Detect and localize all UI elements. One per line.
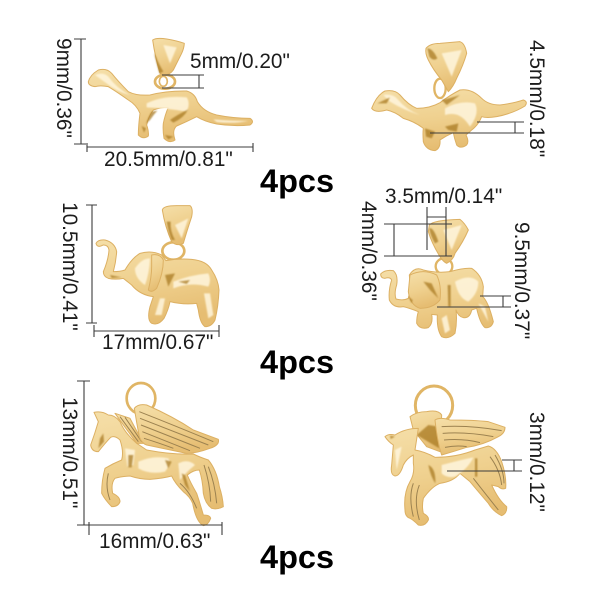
dimension: dinosaur width 20.5mm: 20.5mm/0.81"	[104, 148, 233, 171]
dimension: pegasus width 16mm: 16mm/0.63"	[99, 530, 210, 553]
charm: pegasus front view	[91, 383, 223, 526]
dimension: elephant bail width 3.5mm: 3.5mm/0.14"	[385, 185, 502, 208]
dimension: elephant bail width 3.5mm	[385, 185, 502, 256]
dimension: pegasus height 13mm: 13mm/0.51"	[58, 397, 81, 508]
charm: elephant angled view	[381, 219, 493, 338]
charm: elephant front view	[96, 206, 219, 327]
dimension: dinosaur thickness 4.5mm	[430, 40, 548, 157]
dimension: dinosaur height 9mm	[52, 38, 86, 144]
charm: pegasus angled view	[385, 386, 507, 525]
dimension: elephant height 10.5mm: 10.5mm/0.41"	[58, 202, 81, 331]
dimension: dinosaur width 20.5mm	[87, 143, 253, 171]
dimension: elephant height 10.5mm	[58, 202, 97, 331]
dimension: elephant width 17mm: 17mm/0.67"	[102, 331, 213, 354]
dimension: elephant bail height 4mm	[357, 201, 452, 301]
dimension: dinosaur height 9mm: 9mm/0.36"	[52, 38, 75, 138]
dimension: pegasus thickness 3mm	[447, 412, 548, 512]
quantity label: pegasus: 4pcs	[260, 539, 334, 575]
dimension: dinosaur bail 5mm: 5mm/0.20"	[190, 50, 290, 73]
dimension: pegasus width 16mm	[89, 522, 222, 553]
dimension: elephant thickness 9.5mm: 9.5mm/0.37"	[510, 222, 533, 339]
charm: dinosaur angled view	[372, 42, 526, 151]
dimension: dinosaur bail 5mm	[162, 50, 290, 88]
dimension: elephant thickness 9.5mm	[437, 222, 533, 339]
charm: dinosaur front view	[88, 38, 252, 142]
dimension: pegasus height 13mm	[58, 381, 90, 525]
dimension: pegasus thickness 3mm: 3mm/0.12"	[525, 412, 548, 512]
quantity label: elephant: 4pcs	[260, 344, 334, 380]
dimension: elephant bail height 4mm: 4mm/0.36"	[357, 201, 380, 301]
dimension: dinosaur thickness 4.5mm: 4.5mm/0.18"	[525, 40, 548, 157]
quantity label: dinosaur: 4pcs	[260, 163, 334, 199]
